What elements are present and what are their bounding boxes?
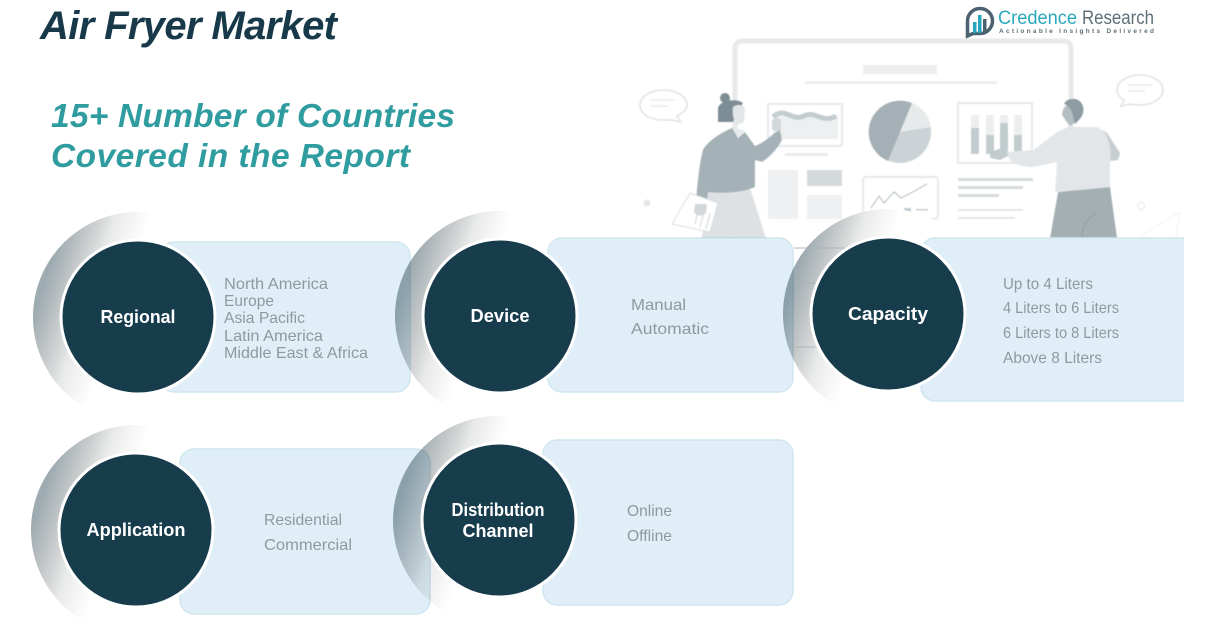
list: regional	[224, 276, 368, 362]
subtitle	[51, 98, 455, 175]
woman presenter	[672, 93, 782, 238]
logo: Credence Research: Credence	[998, 8, 1077, 29]
list: regional: Middle East & Africa	[224, 345, 368, 362]
panel: device	[548, 238, 793, 392]
decorative dots	[644, 200, 650, 206]
circle: device	[423, 239, 577, 393]
list: capacity: Above 8 Liters	[1003, 350, 1102, 367]
circle: regional: Regional	[100, 306, 176, 327]
list: distribution channel: Offline	[627, 528, 672, 545]
icon: right speech bubble	[1117, 75, 1163, 106]
text lines	[958, 178, 1033, 219]
man presenter	[990, 99, 1120, 238]
panel: application	[180, 449, 430, 614]
list: device: Automatic	[631, 321, 709, 338]
list: regional: Asia Pacific	[224, 310, 305, 327]
list: capacity	[1003, 276, 1119, 367]
circle: distribution channel: Channel	[462, 520, 534, 541]
faint grid lines behind capacity crescent	[794, 248, 845, 347]
crescent: distribution channel	[393, 416, 603, 626]
crescents behind the circles	[31, 209, 993, 630]
list: device	[631, 297, 709, 338]
subtitle: Covered in the Report	[51, 138, 412, 175]
list: capacity: Up to 4 Liters	[1003, 276, 1093, 293]
circle: application	[59, 453, 213, 607]
logo: Credence Research	[968, 8, 1154, 36]
tiles	[768, 170, 842, 219]
crescent: device	[395, 211, 605, 421]
list: regional: Latin America	[224, 328, 323, 345]
illustration: presentation scene	[639, 38, 1180, 238]
logo: Credence Research: Research	[1082, 8, 1154, 29]
panel: capacity	[921, 238, 1206, 401]
screen frame	[732, 38, 1074, 128]
title: Air Fryer Market	[39, 4, 339, 48]
list: application: Commercial	[264, 537, 352, 554]
list: capacity: 6 Liters to 8 Liters	[1003, 325, 1119, 342]
circle: regional	[61, 240, 215, 394]
panel: regional	[160, 242, 410, 392]
circle: distribution channel: Distribution	[452, 499, 544, 520]
list: distribution channel: Online	[627, 503, 672, 520]
subtitle: 15+ Number of Countries	[51, 98, 455, 135]
circle: device: Device	[470, 305, 530, 326]
crescent: capacity	[783, 209, 993, 419]
chart: pie	[869, 101, 931, 163]
icon: logo mark	[968, 8, 992, 36]
circle: application: Application	[86, 519, 186, 540]
chart: bars	[958, 103, 1032, 163]
panel: distribution channel	[543, 440, 793, 605]
list: application	[264, 512, 352, 554]
crescent: application	[31, 425, 241, 630]
crescent: regional	[33, 212, 243, 422]
logo: Credence Research: Actionable Insights Delivered	[999, 28, 1154, 35]
circle: distribution channel	[422, 443, 576, 597]
icon: left speech bubble	[640, 90, 687, 122]
list: regional: North America	[224, 276, 328, 293]
list: regional: Europe	[224, 293, 274, 310]
list: distribution channel	[627, 503, 672, 545]
list: capacity: 4 Liters to 6 Liters	[1003, 300, 1119, 317]
circle: capacity: Capacity	[848, 303, 929, 324]
circle: capacity	[811, 237, 965, 391]
chart: line	[863, 177, 938, 219]
list: device: Manual	[631, 297, 686, 314]
chart: area wave	[768, 104, 842, 146]
list: application: Residential	[264, 512, 342, 529]
